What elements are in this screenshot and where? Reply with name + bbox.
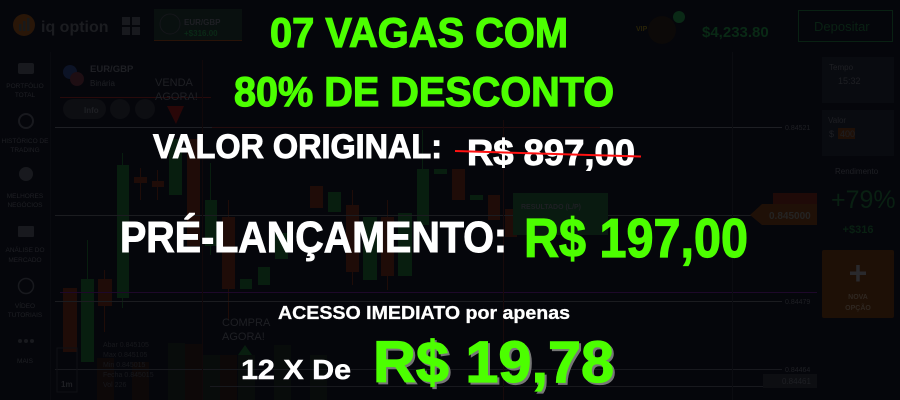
installments label: 12 X De bbox=[241, 354, 351, 385]
price grid lines: 0.84479 bbox=[785, 299, 810, 306]
right trading panel: + bbox=[849, 255, 867, 291]
asset selector and trade labels: 0.845000 bbox=[769, 211, 811, 222]
right trading panel: 400 bbox=[840, 129, 855, 139]
asset selector and trade labels: Vol 226 bbox=[103, 382, 126, 389]
headline: vagas: 07 VAGAS COM bbox=[270, 9, 568, 56]
asset selector and trade labels bbox=[57, 64, 817, 392]
right trading panel: NOVA bbox=[848, 294, 868, 301]
asset selector and trade labels: Binária bbox=[90, 79, 115, 88]
left sidebar: TUTORIAIS bbox=[8, 312, 43, 319]
asset selector and trade labels: VENDA bbox=[155, 77, 194, 89]
price grid lines bbox=[55, 52, 817, 400]
asset selector and trade labels: Min 0.845015 bbox=[103, 362, 146, 369]
label: pré-lançamento: PRÉ-LANÇAMENTO: bbox=[120, 212, 507, 262]
right trading panel: 15:32 bbox=[838, 76, 861, 86]
left sidebar: VÍDEO bbox=[15, 301, 35, 310]
asset selector and trade labels: EUR/GBP bbox=[90, 64, 134, 75]
left sidebar: HISTÓRICO DE bbox=[2, 136, 49, 145]
asset selector and trade labels: AGORA! bbox=[222, 331, 265, 343]
asset selector and trade labels: Abar 0.845105 bbox=[103, 342, 149, 349]
top navigation bar: Depositar bbox=[814, 19, 870, 34]
headline: desconto: 80% DE DESCONTO bbox=[234, 68, 614, 115]
left sidebar: NEGÓCIOS bbox=[7, 200, 43, 209]
top navigation bar: $4,233.80 bbox=[702, 24, 769, 41]
candlestick chart bbox=[63, 130, 517, 400]
top navigation bar bbox=[13, 9, 892, 44]
asset selector and trade labels: RESULTADO (L/P) bbox=[521, 204, 581, 211]
asset selector and trade labels: 1m bbox=[61, 380, 73, 389]
right trading panel bbox=[822, 57, 896, 318]
top navigation bar: iq option bbox=[41, 19, 109, 36]
right trading panel: Rendimento bbox=[835, 167, 879, 176]
immediate access line: ACESSO IMEDIATO por apenas bbox=[278, 303, 570, 323]
left sidebar: PORTFÓLIO bbox=[6, 81, 44, 90]
pre-launch price: R$ 197,00 bbox=[524, 207, 748, 269]
asset selector and trade labels: 0.84461 bbox=[782, 377, 811, 386]
right trading panel: +$316 bbox=[843, 224, 873, 236]
left sidebar bbox=[2, 52, 51, 400]
left sidebar: TOTAL bbox=[15, 92, 36, 99]
right trading panel: OPÇÃO bbox=[845, 303, 871, 312]
original price with strikethrough: R$ 897,00 bbox=[467, 132, 635, 173]
right trading panel: Tempo bbox=[829, 63, 854, 72]
right trading panel: $ bbox=[829, 129, 834, 139]
left sidebar: MERCADO bbox=[8, 257, 42, 264]
top navigation bar: VIP bbox=[636, 26, 648, 33]
asset selector and trade labels: Info bbox=[84, 106, 99, 115]
top navigation bar: +$316.00 bbox=[184, 29, 218, 38]
asset selector and trade labels: AGORA! bbox=[155, 91, 198, 103]
label: valor original: VALOR ORIGINAL: bbox=[153, 128, 442, 166]
left sidebar: TRADING bbox=[10, 147, 40, 154]
installment price with shadow: R$ 19,78 bbox=[375, 332, 616, 397]
right trading panel: Valor bbox=[828, 116, 846, 125]
price grid lines: 0.84464 bbox=[785, 367, 810, 374]
left sidebar: ANÁLISE DO bbox=[5, 245, 45, 254]
asset selector and trade labels: COMPRA bbox=[222, 317, 271, 329]
installment price with shadow: R$ 19,78 bbox=[373, 330, 614, 395]
left sidebar: MAIS bbox=[17, 358, 34, 365]
left sidebar: MELHORES bbox=[7, 193, 44, 200]
price grid lines: 0.84521 bbox=[785, 125, 810, 132]
asset selector and trade labels: Max 0.845105 bbox=[103, 352, 147, 359]
right trading panel: +79% bbox=[831, 186, 896, 214]
asset selector and trade labels: Fecha 0.845015 bbox=[103, 372, 154, 379]
top navigation bar: EUR/GBP bbox=[184, 18, 221, 27]
